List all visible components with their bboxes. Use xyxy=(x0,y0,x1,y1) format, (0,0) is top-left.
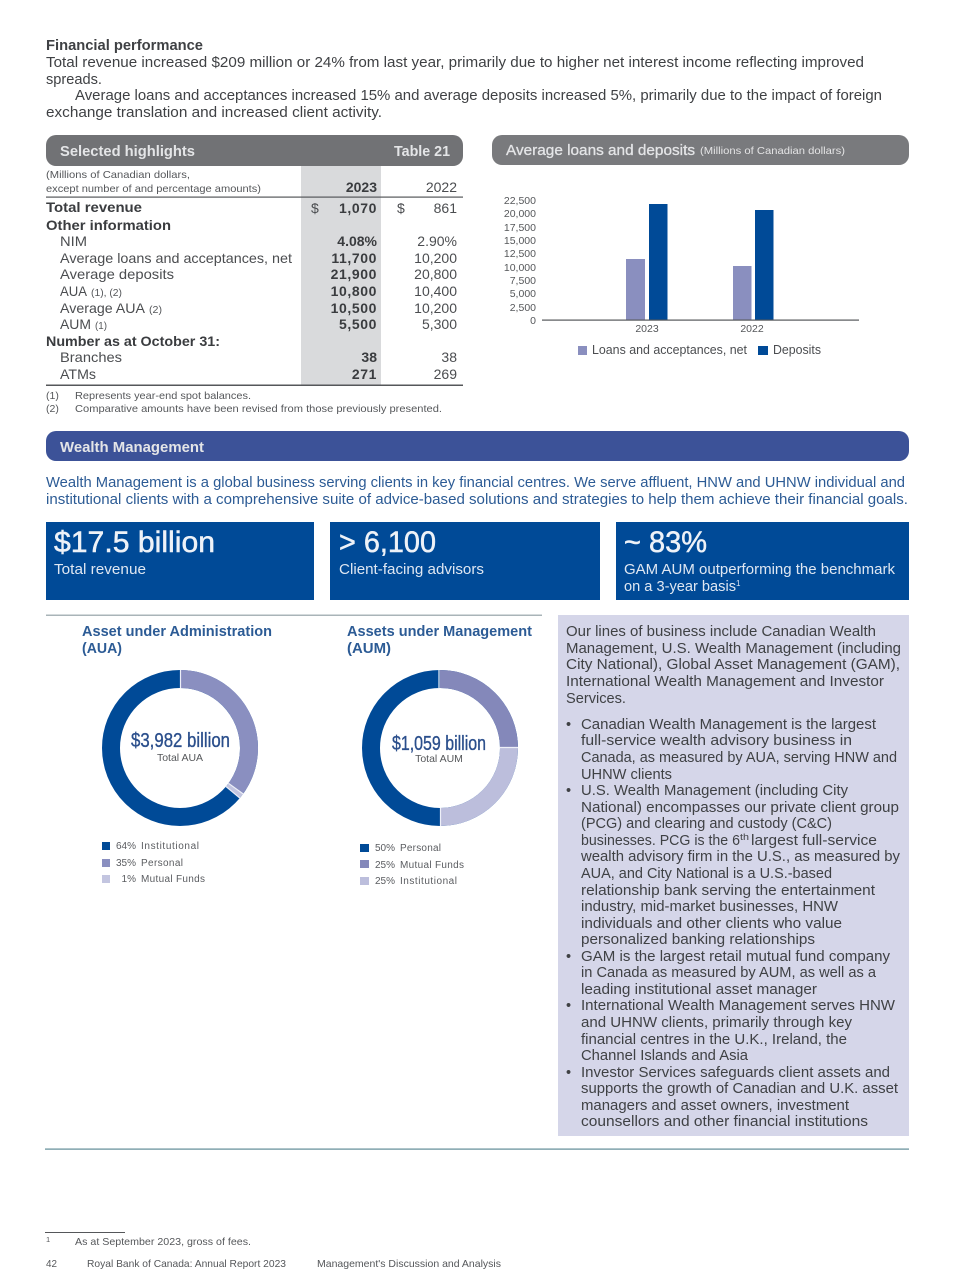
bullet: Investor Services: managers and asset owners, investment xyxy=(581,1098,849,1114)
legend: AUA xyxy=(102,841,205,885)
intro text: financial performance: Average loans and acceptances increased 15% and average deposits increased 5%, primarily due to the impact of foreign xyxy=(75,88,882,104)
bullet: GAM: • xyxy=(566,949,571,965)
intro text: financial performance xyxy=(46,38,882,121)
wealth management intro: Wealth Management is a global business serving clients in key financial centres. We serve affluent, HNW and UHNW individual and xyxy=(46,475,905,491)
bullet: U.S. Wealth Management: businesses. PCG is the 6 xyxy=(581,833,740,849)
legend: AUM xyxy=(360,843,464,887)
column headings: except number of and percentage amounts) xyxy=(46,183,261,195)
2023 values xyxy=(311,200,378,382)
panel: assets under administration xyxy=(82,624,272,885)
2023 values: 38 xyxy=(361,349,377,365)
bullet: Canadian Wealth Management: • xyxy=(566,717,571,733)
bullet: International Wealth Management: and UHNW clients, primarily through key xyxy=(581,1015,853,1031)
heading: AUA: (AUA) xyxy=(82,641,122,657)
row labels: (2) xyxy=(149,304,162,316)
bullet: Canadian Wealth Management xyxy=(566,717,897,783)
row labels: Average AUA xyxy=(60,300,146,316)
legend: AUM: Mutual Funds xyxy=(400,860,464,871)
chart header bar: Average loans and deposits xyxy=(506,142,695,159)
page footer: 42 xyxy=(46,1258,57,1270)
row labels: Number as at October 31: xyxy=(46,333,220,349)
y axis labels: 20,000 xyxy=(504,208,536,220)
y axis labels: 10,000 xyxy=(504,262,536,274)
2022 values: 10,200 xyxy=(414,300,457,316)
bullet: Investor Services: Investor Services safeguards client assets and xyxy=(581,1065,890,1081)
2022 values: 38 xyxy=(441,349,457,365)
x axis labels: 2022 xyxy=(740,323,764,335)
bullet: GAM: GAM is the largest retail mutual fund company xyxy=(581,949,891,965)
page footer xyxy=(46,1258,501,1270)
donut centre: AUA total: Total AUA xyxy=(157,752,203,764)
2023 values: 10,500 xyxy=(331,300,377,316)
bullet: Investor Services: • xyxy=(566,1065,571,1081)
table header bar: Table 21 xyxy=(394,143,450,160)
overview paragraph: Our lines of business include Canadian Wealth xyxy=(566,624,876,640)
chart header bar xyxy=(492,135,909,165)
stat card: total revenue: Total revenue xyxy=(54,562,146,578)
table footnotes: Represents year-end spot balances. xyxy=(75,390,251,402)
table header bar: Selected highlights xyxy=(60,143,195,160)
bullet: U.S. Wealth Management: th xyxy=(740,832,749,842)
row labels: Average loans and acceptances, net xyxy=(60,250,292,266)
chart legend: Deposits xyxy=(773,343,821,357)
heading bar: wealth management xyxy=(46,431,909,461)
legend: AUA: 64% xyxy=(116,841,136,852)
2022 values: 2.90% xyxy=(417,233,457,249)
stat card: total revenue: $17.5 billion xyxy=(54,526,215,559)
overview paragraph: Management, U.S. Wealth Management (including xyxy=(566,641,901,657)
intro text: financial performance: exchange translation and increased client activity. xyxy=(46,105,382,121)
legend: AUA: Institutional xyxy=(141,841,199,852)
bullet: U.S. Wealth Management: industry, mid-market businesses, HNW xyxy=(581,899,838,915)
bullet: Investor Services: counsellors and other financial institutions xyxy=(581,1114,868,1130)
2022 values: 20,800 xyxy=(414,266,457,282)
bullet: Canadian Wealth Management: UHNW clients xyxy=(581,767,672,783)
y axis labels: 7,500 xyxy=(510,275,536,287)
overview paragraph: City National), Global Asset Management (GAM), xyxy=(566,657,900,673)
bullet: U.S. Wealth Management: personalized banking relationships xyxy=(581,932,815,948)
row labels: AUA xyxy=(60,283,88,299)
donut centre: AUM total xyxy=(392,733,486,765)
table footnotes xyxy=(46,390,442,415)
stat card: GAM AUM: ~ 83% xyxy=(624,526,707,559)
y axis labels: 2,500 xyxy=(510,302,536,314)
2022 values: $ xyxy=(397,200,405,216)
stat card: GAM AUM xyxy=(616,522,909,600)
column headings: 2023 xyxy=(346,179,377,195)
bullet: Canadian Wealth Management: Canada, as measured by AUA, serving HNW and xyxy=(581,750,897,766)
column headings xyxy=(46,169,457,195)
overview paragraph xyxy=(566,624,901,707)
heading: AUM: (AUM) xyxy=(347,641,391,657)
2023 values: 5,500 xyxy=(339,316,377,332)
stat card: advisors: > 6,100 xyxy=(339,526,436,559)
intro text: financial performance: spreads. xyxy=(46,72,102,88)
heading: AUM xyxy=(347,624,532,657)
panel: lines of business xyxy=(558,615,909,1136)
row labels: NIM xyxy=(60,233,87,249)
donut chart: AUA xyxy=(111,670,249,817)
stat card: total revenue xyxy=(46,522,314,600)
row labels: (1) xyxy=(95,320,107,332)
heading: AUA xyxy=(82,624,272,657)
2023 values: 11,700 xyxy=(331,250,377,266)
page footer: Management's Discussion and Analysis xyxy=(317,1258,501,1270)
bullet: U.S. Wealth Management: wealth advisory firm in the U.S., as measured by xyxy=(580,849,901,865)
y axis labels: 0 xyxy=(530,315,536,327)
legend: AUM: Institutional xyxy=(400,876,457,887)
row labels: (1), (2) xyxy=(91,287,122,299)
bullet: U.S. Wealth Management: individuals and other clients who value xyxy=(581,916,842,932)
2022 values: 10,400 xyxy=(414,283,457,299)
2023 values: 21,900 xyxy=(331,266,377,282)
bullet: Canadian Wealth Management: Canadian Wealth Management is the largest xyxy=(581,717,876,733)
legend: AUM: 25% xyxy=(375,860,395,871)
y axis labels: 12,500 xyxy=(504,248,536,260)
y axis labels xyxy=(504,195,536,327)
bullet: U.S. Wealth Management xyxy=(566,783,901,948)
2023 values: $ xyxy=(311,200,319,216)
bullet: GAM: leading institutional asset manager xyxy=(581,982,817,998)
chart legend: Loans and acceptances, net xyxy=(592,343,748,357)
legend: AUA: Mutual Funds xyxy=(141,874,205,885)
heading bar: wealth management: Wealth Management xyxy=(60,439,204,456)
donut chart: AUM xyxy=(371,670,518,826)
legend: AUM: 50% xyxy=(375,843,395,854)
table footnotes: Comparative amounts have been revised from those previously presented. xyxy=(75,403,442,415)
bars xyxy=(626,204,774,320)
heading: AUM: Assets under Management xyxy=(347,624,532,640)
bullet: International Wealth Management: Channel Islands and Asia xyxy=(581,1048,749,1064)
row labels: Other information xyxy=(46,217,171,233)
row labels: AUM xyxy=(60,316,91,332)
bullet: International Wealth Management: International Wealth Management serves HNW xyxy=(581,998,895,1014)
bullet: Canadian Wealth Management: full-service wealth advisory business in xyxy=(581,733,852,749)
table footnotes: (2) xyxy=(46,403,59,415)
y axis labels: 17,500 xyxy=(504,222,536,234)
row labels: Branches xyxy=(60,349,122,365)
wealth management intro: institutional clients with a comprehensive suite of advice-based solutions and strategies to help them achieve their financial goals. xyxy=(46,492,908,508)
bullet: International Wealth Management: financial centres in the U.K., Ireland, the xyxy=(581,1032,847,1048)
row labels: Total revenue xyxy=(46,199,142,215)
2022 values: 10,200 xyxy=(414,250,457,266)
x axis labels: 2023 xyxy=(635,323,659,335)
2022 values: 269 xyxy=(434,366,457,382)
bullet: GAM: in Canada as measured by AUM, as well as a xyxy=(581,965,877,981)
stat card: advisors: Client-facing advisors xyxy=(339,562,484,578)
donut centre: AUA total xyxy=(131,730,230,764)
intro text: financial performance: Total revenue increased $209 million or 24% from last year, primarily due to higher net interest income reflecting improved xyxy=(46,55,864,71)
stat card: GAM AUM: 1 xyxy=(736,579,741,588)
panel: assets under management xyxy=(347,624,532,887)
row labels: ATMs xyxy=(60,366,96,382)
2022 values: 861 xyxy=(434,200,457,216)
column headings: 2022 xyxy=(426,179,457,195)
stat card: GAM AUM: GAM AUM outperforming the benchmark xyxy=(624,562,896,578)
bullet: U.S. Wealth Management: AUA, and City National is a U.S.-based xyxy=(581,866,832,882)
bullet: U.S. Wealth Management: U.S. Wealth Management (including City xyxy=(581,783,849,799)
legend: AUA: Personal xyxy=(141,858,183,869)
y axis labels: 22,500 xyxy=(504,195,536,207)
bullet: Investor Services xyxy=(566,1065,898,1130)
intro text: financial performance: Financial performance xyxy=(46,38,203,54)
bullet: U.S. Wealth Management: • xyxy=(566,783,571,799)
bullet: U.S. Wealth Management: largest full-service xyxy=(751,833,877,849)
page footer: Royal Bank of Canada: Annual Report 2023 xyxy=(87,1258,286,1270)
highlighted 2023 column xyxy=(301,166,381,385)
table header bar xyxy=(46,135,463,166)
legend: AUA: 35% xyxy=(116,858,136,869)
legend: AUM: 25% xyxy=(375,876,395,887)
overview paragraph: International Wealth Management and Investor xyxy=(566,674,884,690)
row labels: Average deposits xyxy=(60,266,174,282)
panel: selected highlights table xyxy=(46,135,463,415)
chart header bar: (Millions of Canadian dollars) xyxy=(700,145,845,157)
panel: average loans and deposits chart xyxy=(492,135,909,357)
column headings: (Millions of Canadian dollars, xyxy=(46,169,190,181)
footnote: 1 xyxy=(46,1235,50,1244)
y axis labels: 5,000 xyxy=(510,288,536,300)
overview paragraph: Services. xyxy=(566,691,626,707)
bullet: U.S. Wealth Management: relationship bank serving the entertainment xyxy=(581,883,875,899)
2022 values: 5,300 xyxy=(422,316,457,332)
stat card: GAM AUM: on a 3-year basis xyxy=(624,579,736,595)
bullet: Investor Services: supports the growth of Canadian and U.K. asset xyxy=(581,1081,898,1097)
2023 values: 1,070 xyxy=(339,200,377,216)
wealth management intro xyxy=(46,475,908,508)
donut centre: AUM total: Total AUM xyxy=(415,753,463,765)
table footnotes: (1) xyxy=(46,390,59,402)
row labels xyxy=(46,199,292,382)
2023 values: 10,800 xyxy=(331,283,377,299)
footnote: As at September 2023, gross of fees. xyxy=(75,1236,251,1248)
bullet: International Wealth Management xyxy=(566,998,895,1064)
legend: AUM: Personal xyxy=(400,843,441,854)
donut centre: AUM total: $1,059 billion xyxy=(392,733,486,755)
bullet: U.S. Wealth Management: National) encompasses our private client group xyxy=(581,800,899,816)
bullet: GAM xyxy=(566,949,891,998)
x axis labels xyxy=(635,323,764,335)
donut centre: AUA total: $3,982 billion xyxy=(131,730,230,752)
bullet: International Wealth Management: • xyxy=(566,998,571,1014)
stat card: advisors xyxy=(330,522,600,600)
2023 values: 271 xyxy=(352,366,377,382)
legend: AUA: 1% xyxy=(122,874,136,885)
heading: AUA: Asset under Administration xyxy=(82,624,272,640)
2022 values xyxy=(397,200,457,382)
2023 values: 4.08% xyxy=(337,233,378,249)
y axis labels: 15,000 xyxy=(504,235,536,247)
bullet: U.S. Wealth Management: (PCG) and clearing and custody (C&C) xyxy=(581,816,832,832)
chart legend xyxy=(578,343,821,357)
